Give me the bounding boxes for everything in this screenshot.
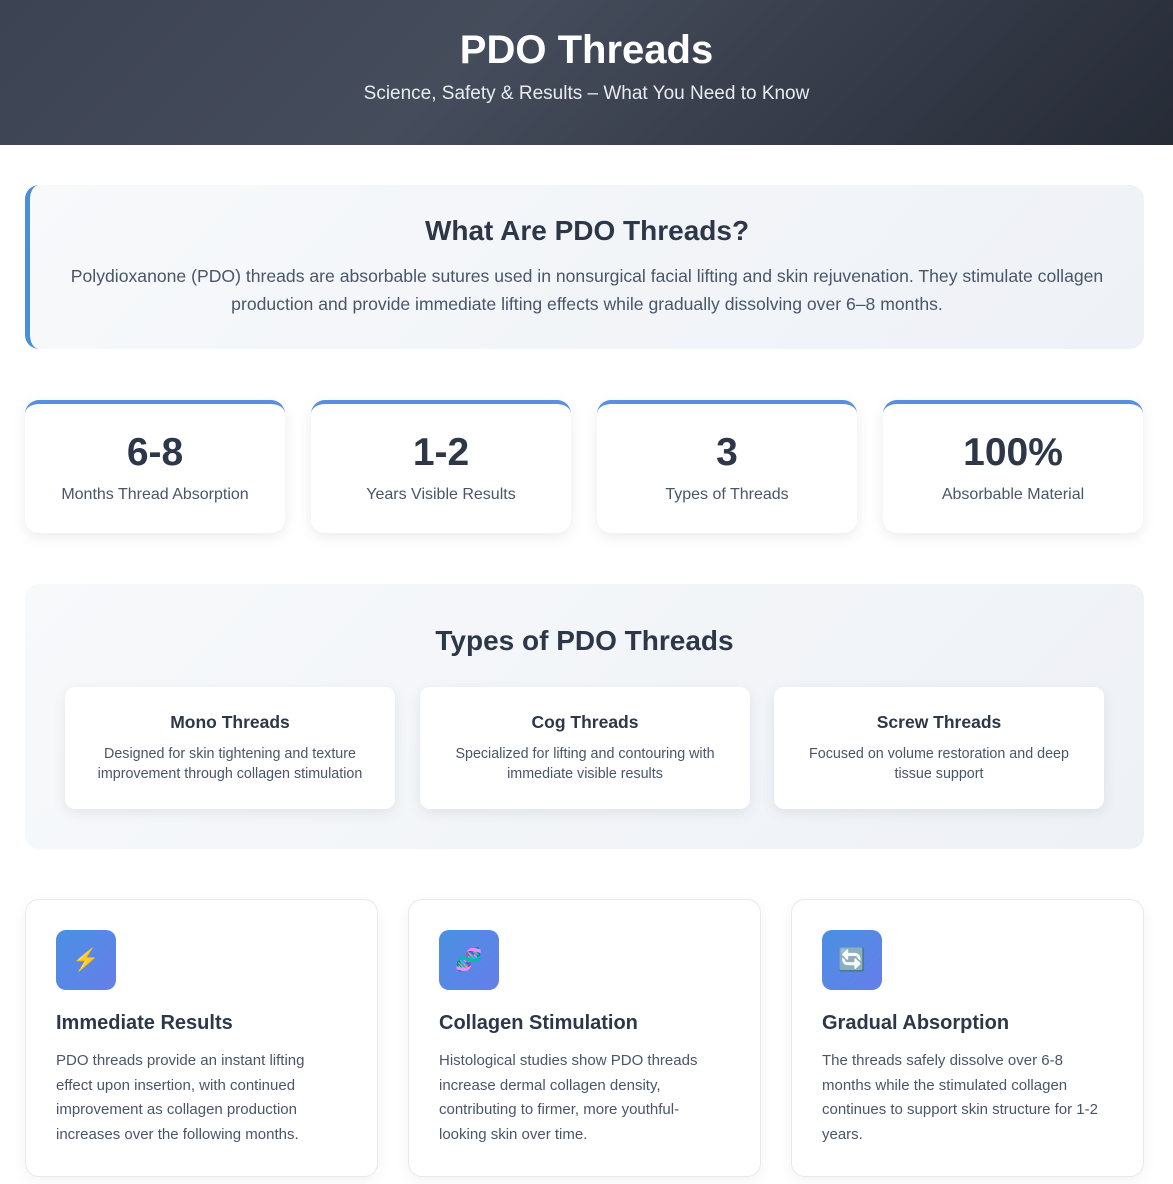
panel: intro [25,185,1144,349]
header: Science, Safety & Results – What You Need to Know [364,83,809,104]
stat: 100%: Absorbable Material [942,486,1084,503]
icon: cycle: 🔄 [838,947,866,972]
header [0,0,1173,145]
panel: types of threads [25,584,1144,849]
card: gradual absorption: Gradual Absorption [822,1012,1009,1034]
card: mono threads [65,687,395,809]
stat: 1-2 years [311,400,571,533]
card: mono threads: Designed for skin tightening and texture improvement through collagen stimulation [98,746,362,782]
icon: dna [439,930,499,990]
text: intro description: Polydioxanone (PDO) threads are absorbable sutures used in nonsurgical facial lifting and skin rejuvenation. They stimulate collagen production and provide immediate lifting effects while gradually dissolving over 6–8 months. [71,266,1103,314]
heading: types: Types of PDO Threads [435,625,734,656]
stat: 6-8 months [25,400,285,533]
card: collagen stimulation: Histological studies show PDO threads increase dermal collagen density, contributing to firmer, more youthful-looking skin over time. [439,1052,697,1142]
card: immediate results [25,899,378,1177]
stat: 6-8 months: Months Thread Absorption [61,486,249,503]
card: mono threads: Mono Threads [170,712,290,732]
card: cog threads: Cog Threads [532,712,638,732]
icon: cycle [822,930,882,990]
card: collagen stimulation [408,899,761,1177]
icon: lightning: ⚡ [72,947,100,972]
card: collagen stimulation: Collagen Stimulation [439,1012,638,1034]
card: screw threads [774,687,1104,809]
stat: 1-2 years: Years Visible Results [366,486,516,503]
card: cog threads: Specialized for lifting and contouring with immediate visible results [455,746,715,782]
icon: lightning [56,930,116,990]
card: gradual absorption: The threads safely dissolve over 6-8 months while the stimulated collagen continues to support skin structure for 1-2 years. [822,1052,1098,1142]
stat: 3 types [597,400,857,533]
card: cog threads [420,687,750,809]
stat: 3 types: Types of Threads [665,486,789,503]
card: immediate results: PDO threads provide an instant lifting effect upon insertion, with continued improvement as collagen production increases over the following months. [56,1052,304,1142]
stat: 100% [883,400,1143,533]
stat: 6-8 months: 6-8 [127,431,183,474]
stat: 100%: 100% [963,431,1063,474]
icon: dna: 🧬 [455,947,483,972]
stat: 3 types: 3 [716,431,738,474]
card: gradual absorption [791,899,1144,1177]
stat: 1-2 years: 1-2 [413,431,469,474]
header: PDO Threads [460,28,713,72]
card: immediate results: Immediate Results [56,1012,233,1034]
card: screw threads: Screw Threads [877,712,1001,732]
card: screw threads: Focused on volume restoration and deep tissue support [809,746,1069,782]
heading: what are pdo threads: What Are PDO Threads? [425,215,749,246]
